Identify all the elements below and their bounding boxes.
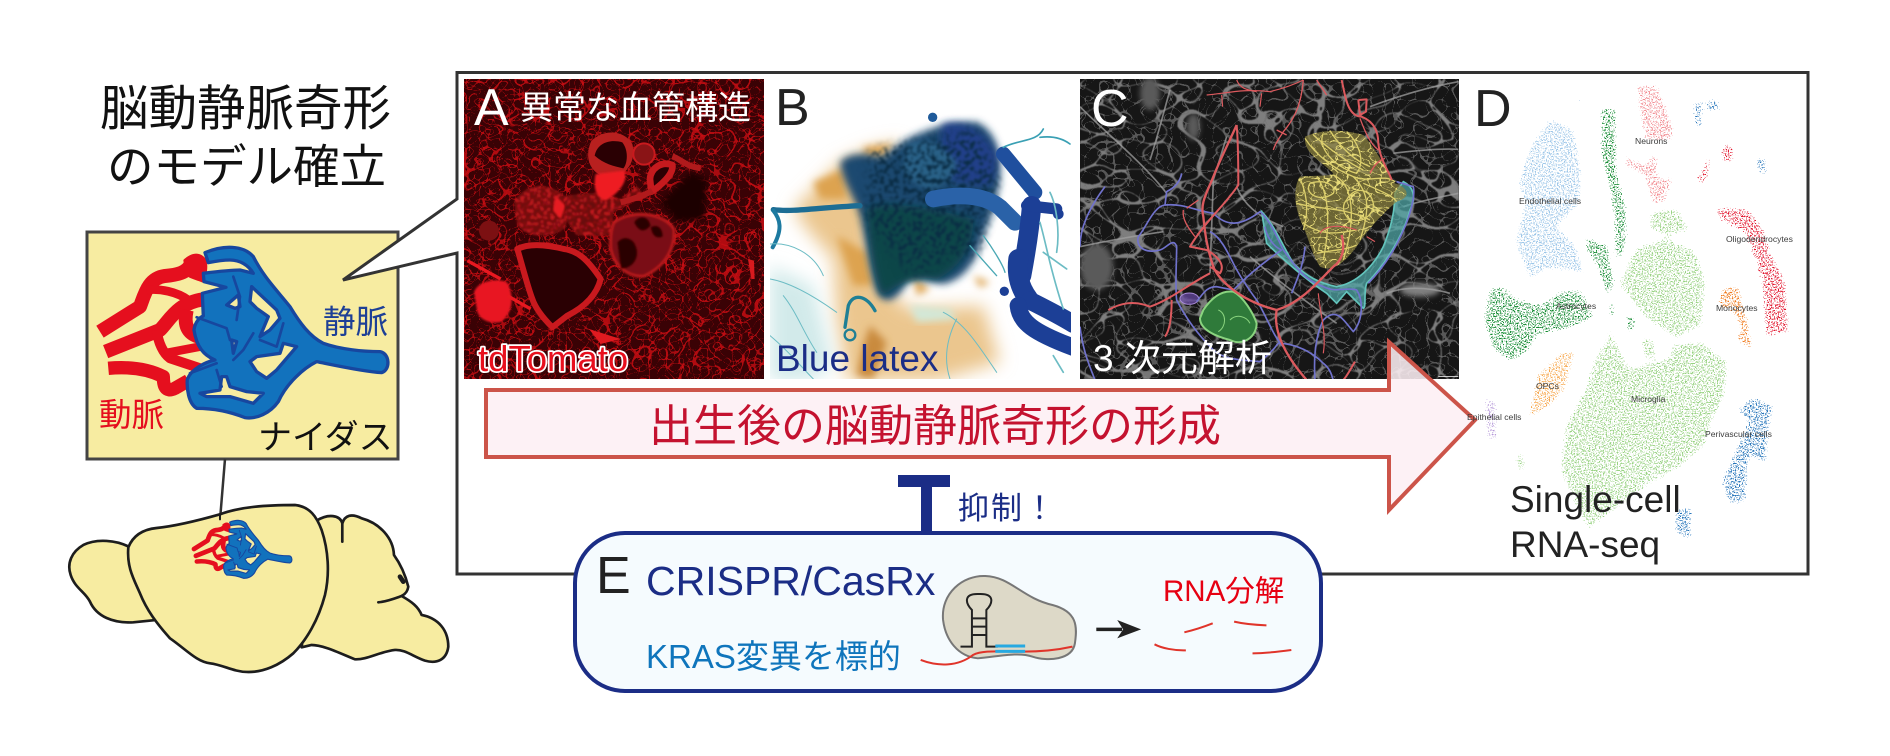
cell labels over plot: Neurons: [1635, 136, 1667, 146]
green blob: [1200, 291, 1257, 342]
cluster: microglia: [1514, 207, 1730, 532]
cell labels over plot: OPCs: [1536, 381, 1559, 391]
panel letter E: E: [596, 547, 631, 605]
panel C: 3D analysis image: [1080, 77, 1459, 380]
red vessels: [1108, 80, 1392, 380]
CasRx diagram: [921, 576, 1291, 664]
yellow tangle: [1295, 131, 1407, 268]
Cas protein blob: [943, 576, 1076, 659]
scale bar: [1438, 376, 1458, 377]
cell labels over plot: Oligodendrocytes: [1726, 234, 1793, 244]
panel letter C: C: [1091, 80, 1129, 138]
brain: cerebellum and brainstem: [302, 516, 448, 662]
large hole: [517, 245, 601, 327]
title: のモデル確立: [107, 141, 386, 193]
cell labels over plot: Endothelial cells: [1519, 196, 1581, 206]
cell labels over plot: Astrocytes: [1556, 301, 1596, 311]
cluster: OPCs: [1526, 350, 1577, 422]
long grey fibres: [1080, 82, 1458, 323]
vein label: 静脈: [323, 304, 388, 340]
cluster: oligodendrocytes: [1693, 143, 1791, 338]
cyan sheath: [1262, 182, 1413, 308]
caption: abnormal vascular structure: 異常な血管構造: [520, 89, 751, 126]
KRAS target label: KRAS変異を標的: [646, 638, 901, 675]
Blue latex label: Blue latex: [776, 338, 939, 379]
tan tissue: [793, 142, 1000, 381]
dark area: [661, 172, 707, 222]
dark vascular mass: [840, 122, 1000, 300]
mouse brain illustration: [69, 505, 448, 672]
right hole ring: [650, 164, 672, 192]
degraded RNA fragments: [1155, 622, 1291, 653]
tdTomato label: tdTomato: [478, 338, 628, 379]
panel B: blue latex image: [770, 79, 1073, 381]
inhibition bar: [898, 475, 1057, 535]
Single-cell RNA-seq label: RNA-seq: [1510, 524, 1660, 565]
large arrow: postnatal AVM formation: [486, 342, 1475, 510]
cell labels over plot: Epithelial cells: [1467, 412, 1521, 422]
brain: cerebrum: [128, 505, 328, 672]
cluster: epithelial cells: [1483, 396, 1498, 443]
cluster: monocytes: [1716, 284, 1755, 353]
cell labels over plot: Monocytes: [1716, 303, 1758, 313]
reaction arrow: [1096, 620, 1141, 638]
thin teal vessels: [773, 206, 860, 210]
artery label: 動脈: [99, 397, 164, 433]
cyan pairing bars: [995, 646, 1025, 651]
arrow text: 出生後の脳動静脈奇形の形成: [649, 402, 1221, 451]
upper ring: [588, 133, 633, 177]
cluster: perivascular cells: [1577, 93, 1776, 543]
panel: nidus closeup: [87, 232, 398, 459]
cluster: neurons: [1623, 83, 1675, 205]
CRISPR/CasRx heading: CRISPR/CasRx: [646, 558, 936, 604]
bright blob below ring: [595, 171, 625, 201]
RNA degradation label: RNA分解: [1163, 575, 1284, 608]
cluster: endothelial cells: [1513, 117, 1587, 282]
panel letter B: B: [775, 79, 810, 137]
title: 脳動静脈奇形: [100, 82, 391, 136]
caption: 3D analysis: 3 次元解析: [1093, 338, 1272, 379]
Single-cell RNA-seq label: [1510, 479, 1681, 565]
small ring: [633, 143, 655, 165]
connector line: [220, 459, 225, 520]
lower rings: [610, 214, 674, 276]
inhibition label: 抑制！: [958, 491, 1057, 526]
panel letter D: D: [1474, 80, 1512, 138]
cell labels over plot: Microglia: [1631, 394, 1666, 404]
soft grey background shapes: [1080, 77, 1440, 297]
target RNA strand: [921, 647, 1072, 664]
bright blob lower left: [474, 280, 512, 323]
icon: nidus vessels: [100, 247, 388, 418]
title: [100, 82, 391, 193]
cluster: astrocytes: [1482, 107, 1639, 363]
brain: olfactory bulb: [69, 541, 157, 622]
Single-cell RNA-seq label: Single-cell: [1510, 479, 1681, 520]
main outlined panel with callout: [343, 72, 1808, 574]
panel letter A: A: [474, 79, 509, 137]
panel D: single-cell RNA-seq scatter plot: [1474, 80, 1791, 565]
small nidus: [194, 520, 292, 578]
cell labels over plot: [1467, 136, 1793, 439]
thick blue vessels: [770, 113, 1073, 379]
panel A: tdTomato image: [464, 79, 764, 379]
purple vessels: [1080, 173, 1414, 380]
cell labels over plot: Perivascular cells: [1705, 429, 1772, 439]
purple small vessel: [1180, 293, 1199, 304]
panel E: CRISPR/CasRx: [575, 533, 1321, 691]
guide RNA hairpin: [960, 594, 998, 647]
textured left mass: [514, 186, 569, 236]
central haze and connections: [564, 186, 644, 236]
nidus label: ナイダス: [258, 419, 393, 457]
